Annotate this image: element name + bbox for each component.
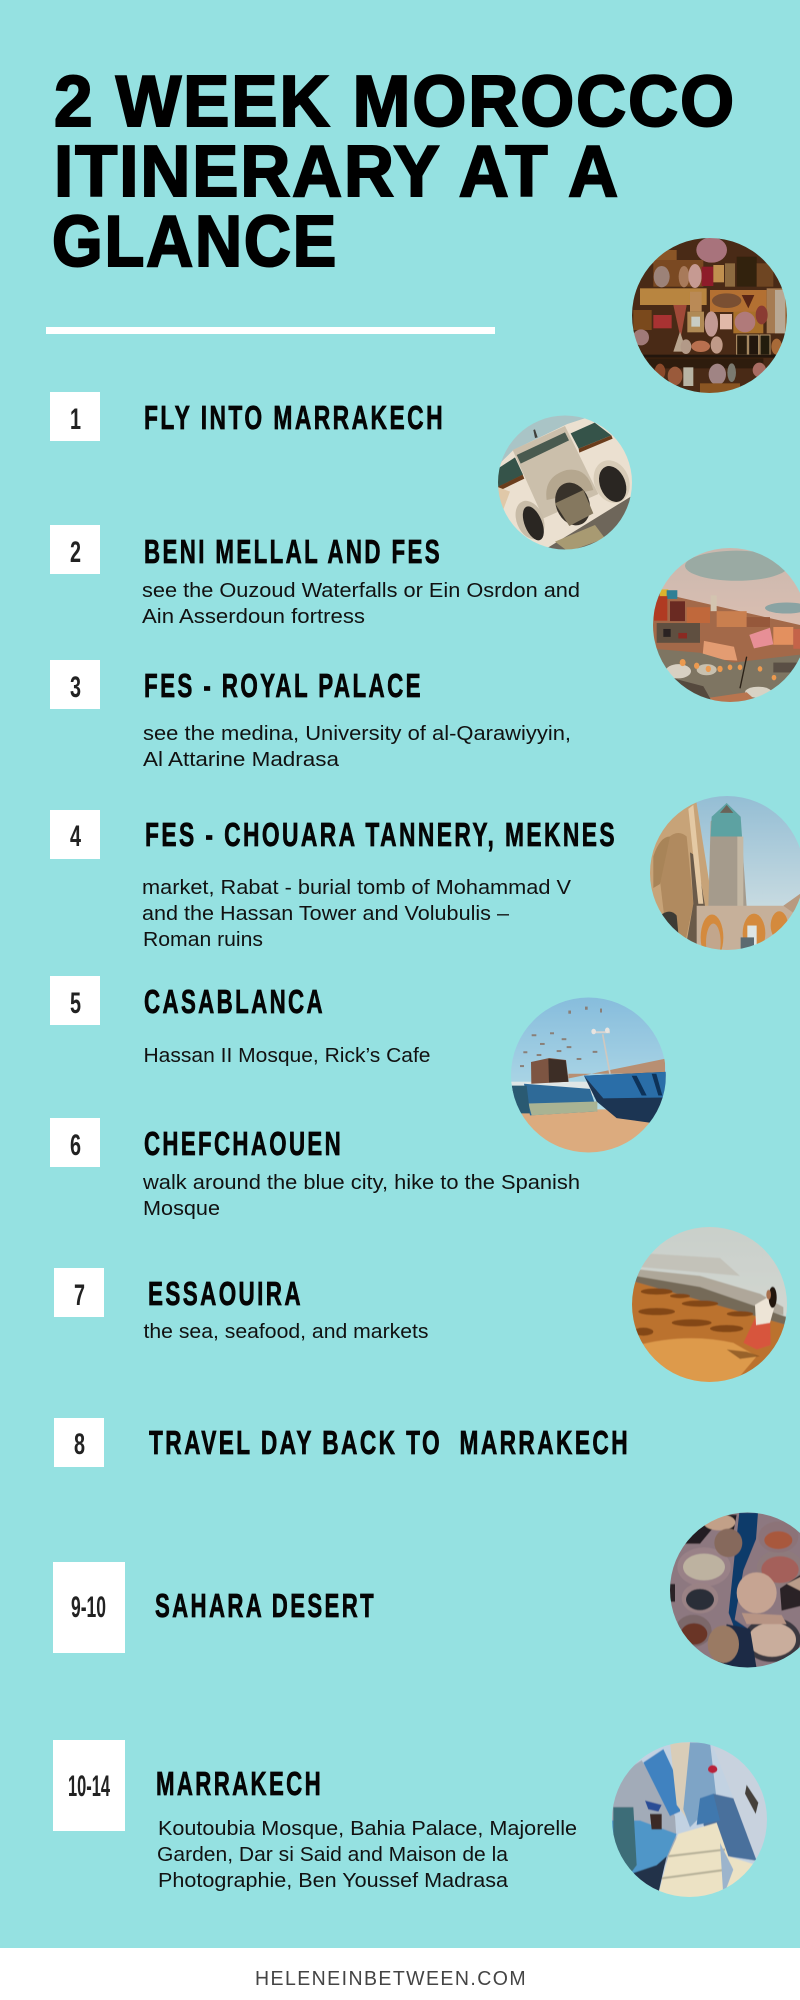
days 10-14 row: Garden, Dar si Said and Maison de la (157, 1843, 509, 1866)
day 6 row (50, 1118, 580, 1220)
day 4 row: and the Hassan Tower and Volubulis – (142, 902, 510, 925)
title: ITINERARY AT A (54, 132, 620, 212)
days 10-14 row: Photographie, Ben Youssef Madrasa (158, 1869, 509, 1892)
white divider under title (46, 327, 495, 334)
day 3 row: FES - ROYAL PALACE (144, 667, 423, 704)
day 7 row: the sea, seafood, and markets (144, 1320, 428, 1343)
title: 2 WEEK MOROCCO (54, 62, 736, 142)
footer band (0, 1948, 800, 2000)
photo: lantern shop (630, 237, 790, 397)
day 8 row: 8 (74, 1428, 85, 1461)
day 4 row: 4 (70, 820, 81, 853)
title (52, 62, 736, 282)
photo: Fes mosque gate (497, 415, 636, 552)
day 5 row: Hassan II Mosque, Rick’s Cafe (144, 1044, 430, 1067)
days 10-14 row (53, 1740, 577, 1892)
day 2 row: BENI MELLAL AND FES (144, 533, 442, 570)
day 3 row (50, 660, 571, 771)
day 4 row: market, Rabat - burial tomb of Mohammad V (142, 876, 571, 899)
day 2 row: 2 (70, 536, 81, 569)
day 4 row: Roman ruins (143, 928, 263, 951)
day 2 row: see the Ouzoud Waterfalls or Ein Osrdon and (142, 579, 580, 602)
day 6 row: walk around the blue city, hike to the Spanish (142, 1171, 580, 1194)
day 7 row: ESSAOUIRA (148, 1275, 303, 1312)
day 5 row: 5 (70, 987, 81, 1020)
title: GLANCE (52, 202, 338, 282)
day 6 row: CHEFCHAOUEN (144, 1125, 343, 1162)
day 3 row: Al Attarine Madrasa (143, 748, 340, 771)
photo: Hassan II Mosque (650, 796, 800, 950)
photo: Chefchaouen blue alley (610, 1740, 770, 1901)
photo: Essaouira boats (507, 995, 670, 1157)
day 3 row: 3 (70, 671, 81, 704)
days 10-14 row: 10-14 (68, 1770, 110, 1803)
day 5 row (50, 976, 430, 1067)
footer band: HELENEINBETWEEN.COM (255, 1967, 527, 1990)
day 1 row: 1 (70, 403, 81, 436)
day 3 row: see the medina, University of al-Qarawiyyin, (143, 722, 571, 745)
days 10-14 row: Koutoubia Mosque, Bahia Palace, Majorelle (158, 1817, 577, 1840)
day 5 row: CASABLANCA (144, 983, 325, 1020)
day 1 row (50, 392, 445, 441)
day 7 row (54, 1268, 428, 1343)
day 2 row (50, 525, 580, 628)
day 7 row: 7 (74, 1279, 85, 1312)
day 1 row: FLY INTO MARRAKECH (144, 399, 445, 436)
day 4 row (50, 810, 617, 951)
photo: woman on Sahara dunes (630, 1225, 790, 1385)
day 2 row: Ain Asserdoun fortress (142, 605, 365, 628)
days 9-10 row: SAHARA DESERT (155, 1587, 376, 1624)
days 10-14 row: MARRAKECH (156, 1765, 323, 1802)
photo: Marrakech rooftops (650, 546, 800, 704)
days 9-10 row (53, 1562, 376, 1653)
day 8 row (54, 1418, 630, 1467)
day 6 row: Mosque (143, 1197, 220, 1220)
day 6 row: 6 (70, 1129, 81, 1162)
days 9-10 row: 9-10 (71, 1591, 106, 1624)
photo: Chouara tannery vats (668, 1510, 800, 1671)
